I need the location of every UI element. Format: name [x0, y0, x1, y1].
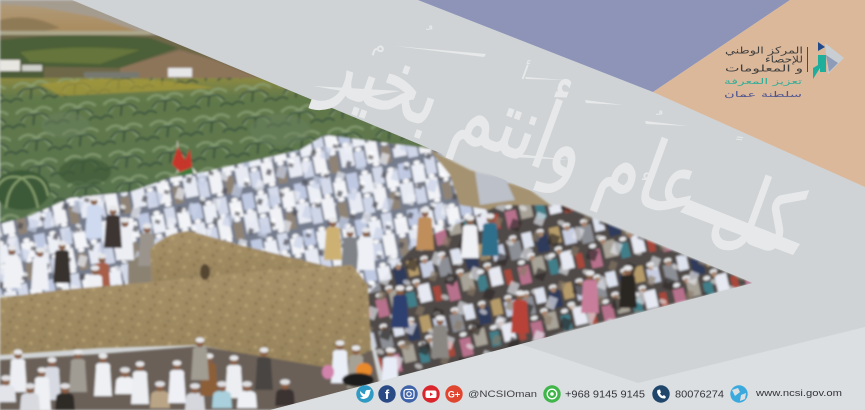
photo: mountains — [0, 0, 158, 36]
calligraphic diacritics: ً — [736, 135, 743, 142]
calligraphic diacritics: ء — [638, 162, 655, 188]
logo mark — [813, 42, 844, 79]
calligraphic diacritics: ُ — [426, 24, 434, 32]
logo name: و المعلومات — [725, 64, 803, 74]
calligraphic diacritics: م — [370, 32, 390, 59]
whatsapp number: +968 9145 9145 — [565, 390, 645, 400]
icon: twitter — [356, 385, 374, 403]
photo: flags — [170, 140, 198, 176]
logo name: المركز الوطني — [725, 46, 803, 56]
social handle: @NCSIOman — [468, 389, 537, 400]
calligraphic diacritics: أ — [518, 59, 532, 85]
calligraphic kashida strokes — [313, 46, 800, 255]
panel: blue triangle — [418, 0, 790, 92]
calligraphic diacritics: ُ — [656, 109, 664, 117]
icon: facebook: f — [385, 387, 390, 402]
toll-free number: 80076274 — [675, 390, 724, 400]
logo country: سلطنة عمان — [724, 90, 803, 99]
calligraphic diacritics — [370, 24, 743, 188]
contact bar — [356, 385, 842, 403]
website: www.ncsi.gov.om — [755, 388, 842, 399]
logo name — [725, 46, 803, 74]
photo: foreground crowd — [0, 337, 399, 410]
panel: lighter bottom band — [270, 327, 865, 410]
icon: globe — [730, 385, 748, 403]
icon: youtube — [422, 385, 440, 403]
photo: back mud wall — [150, 230, 329, 283]
logo: NCSI — [724, 42, 844, 99]
icon: google plus — [445, 385, 463, 403]
icon: facebook — [378, 385, 396, 403]
greeting calligraphy: Eid greeting — [309, 0, 816, 278]
photo: front mud wall — [0, 231, 371, 375]
photo: colourful crowd — [362, 205, 753, 400]
photo: palm grove — [0, 78, 430, 238]
icon: google plus: G+ — [448, 390, 460, 400]
logo tagline: تعزيز المعرفة — [724, 77, 802, 86]
panel: peach corner — [653, 0, 865, 187]
icon: phone — [652, 385, 670, 403]
logo divider — [807, 47, 808, 72]
logo name: للإحصاء — [765, 54, 803, 66]
icon: instagram — [400, 385, 418, 403]
icon: whatsapp — [543, 385, 561, 403]
photo: white-robed crowd — [0, 135, 560, 300]
photo: distant oasis and hillside — [0, 34, 262, 80]
photo: robed figures — [3, 195, 637, 358]
